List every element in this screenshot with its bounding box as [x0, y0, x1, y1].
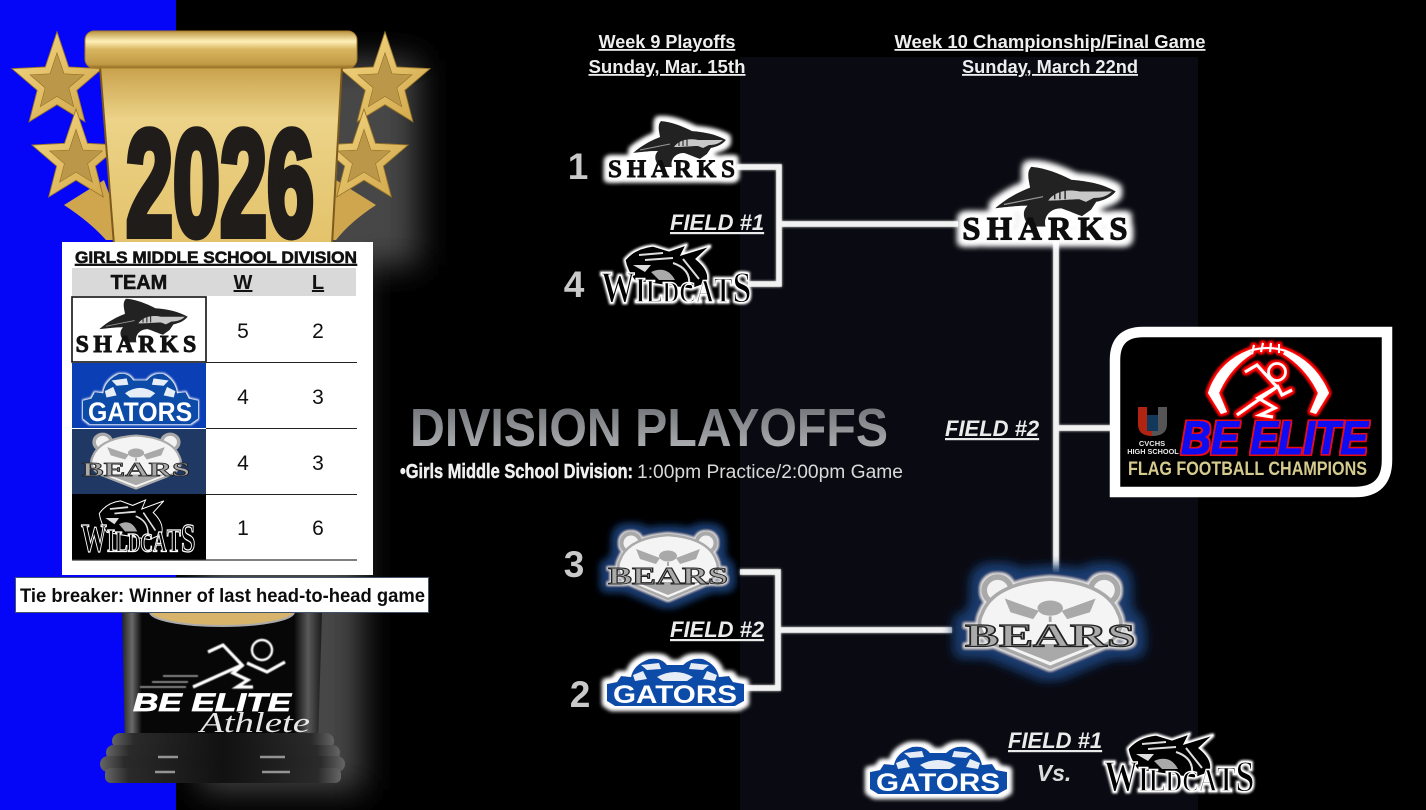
be elite athlete logo text: BE ELITE: [133, 689, 293, 717]
champions text: FLAG FOOTBALL CHAMPIONS: [1128, 458, 1367, 480]
logo: bears seed 3: BEARS: [608, 564, 728, 590]
star handles: [64, 180, 376, 240]
trophy pedestal: [100, 598, 345, 783]
header: wins: W: [234, 272, 253, 294]
logo: bears seed 3: [608, 534, 728, 599]
star: lower right: [320, 109, 408, 197]
logo: sharks seed 1: [608, 121, 735, 183]
title: DIVISION PLAYOFFS: [410, 398, 888, 458]
logo: bears finalist: [965, 577, 1135, 667]
row: wildcats: [72, 494, 357, 561]
logo: gators seed 2: GATORS: [613, 681, 737, 709]
logo: wildcats seed 4: WILDCATS: [601, 263, 751, 312]
seed 3: 3: [564, 544, 584, 585]
logo: sharks finalist: [962, 167, 1128, 248]
heading: week 9: [588, 32, 746, 77]
cup rim: [85, 31, 357, 68]
division schedule: 1:00pm Practice/2:00pm Game: [637, 462, 903, 483]
logo: gators consolation: GATORS: [876, 769, 1000, 797]
division schedule: [400, 461, 903, 483]
row: gators: 4: [237, 386, 249, 409]
trophy glow: [200, 60, 418, 790]
be elite wordmark: BE ELITE: [1181, 411, 1369, 464]
seed 2: 2: [570, 674, 590, 715]
tie breaker note: Tie breaker: Winner of last head-to-head game: [20, 585, 425, 607]
field label: FIELD #2: [670, 617, 765, 642]
seed 4: 4: [564, 264, 585, 305]
gold inset: [150, 598, 294, 626]
row: sharks: 2: [312, 320, 324, 343]
base highlights: [155, 757, 290, 772]
header: team: TEAM: [111, 272, 167, 294]
field label: FIELD #2: [945, 416, 1040, 441]
year: 2026: [126, 99, 314, 267]
logo: bears finalist: BEARS: [965, 618, 1135, 655]
row: wildcats: WILDCATS: [81, 517, 195, 561]
standings table: [62, 242, 373, 575]
row: bears: [72, 429, 357, 494]
star: upper left: [12, 32, 102, 122]
division schedule: •Girls Middle School Division:: [400, 461, 633, 483]
row: wildcats: 6: [312, 517, 324, 540]
row: sharks: 5: [237, 320, 249, 343]
heading: week 9: Sunday, Mar. 15th: [588, 57, 746, 77]
row: bears: BEARS: [82, 459, 190, 481]
row: wildcats: 1: [237, 517, 249, 540]
logo: sharks finalist: SHARKS: [962, 212, 1127, 248]
heading: week 10: [894, 32, 1206, 77]
row: gators: [72, 363, 357, 428]
table card: [62, 242, 373, 575]
bracket lines: [737, 167, 1114, 688]
logo: sharks seed 1: SHARKS: [608, 156, 735, 183]
heading: week 10: Week 10 Championship/Final Game: [894, 32, 1206, 52]
heading: week 9: Week 9 Playoffs: [599, 32, 735, 52]
athlete script text: Athlete: [197, 707, 310, 739]
base rings: [100, 733, 345, 783]
background: dark centre panel: [740, 57, 1198, 810]
row: gators: 3: [312, 386, 324, 409]
heading: week 10: Sunday, March 22nd: [962, 57, 1138, 77]
row: bears: 4: [237, 452, 249, 475]
versus: Vs.: [1037, 760, 1071, 786]
school name: HIGH SCHOOL: [1127, 447, 1179, 456]
logo: gators consolation: [870, 747, 1007, 797]
star: lower left: [32, 109, 120, 197]
champions logo panel: [1115, 332, 1387, 492]
header row: [72, 268, 356, 296]
row: bears: 3: [312, 452, 324, 475]
background: blue left band: [0, 0, 176, 810]
row: sharks: SHARKS: [76, 332, 196, 358]
panel frame: [1115, 332, 1387, 492]
icon: neon football and runner: [1208, 343, 1329, 417]
logo: gators seed 2: [607, 659, 744, 709]
field label: FIELD #1: [1008, 728, 1102, 753]
field label: FIELD #1: [670, 210, 764, 235]
icon: school U crest: [1138, 407, 1167, 436]
school name: CVCHS: [1139, 439, 1165, 448]
row: gators: GATORS: [88, 397, 192, 427]
trophy cup: [12, 31, 430, 267]
seed 1: 1: [568, 146, 588, 187]
row: sharks: [72, 297, 357, 362]
star: upper right: [340, 32, 430, 122]
tie breaker note: [16, 578, 428, 612]
logo: wildcats consolation: WILDCATS: [1104, 752, 1254, 801]
school name: [1127, 439, 1179, 456]
header: losses: L: [312, 272, 324, 294]
cup body: [100, 66, 342, 245]
pedestal column: [122, 612, 322, 745]
table title: GIRLS MIDDLE SCHOOL DIVISION: [75, 249, 357, 267]
icon: runner: [140, 640, 285, 687]
